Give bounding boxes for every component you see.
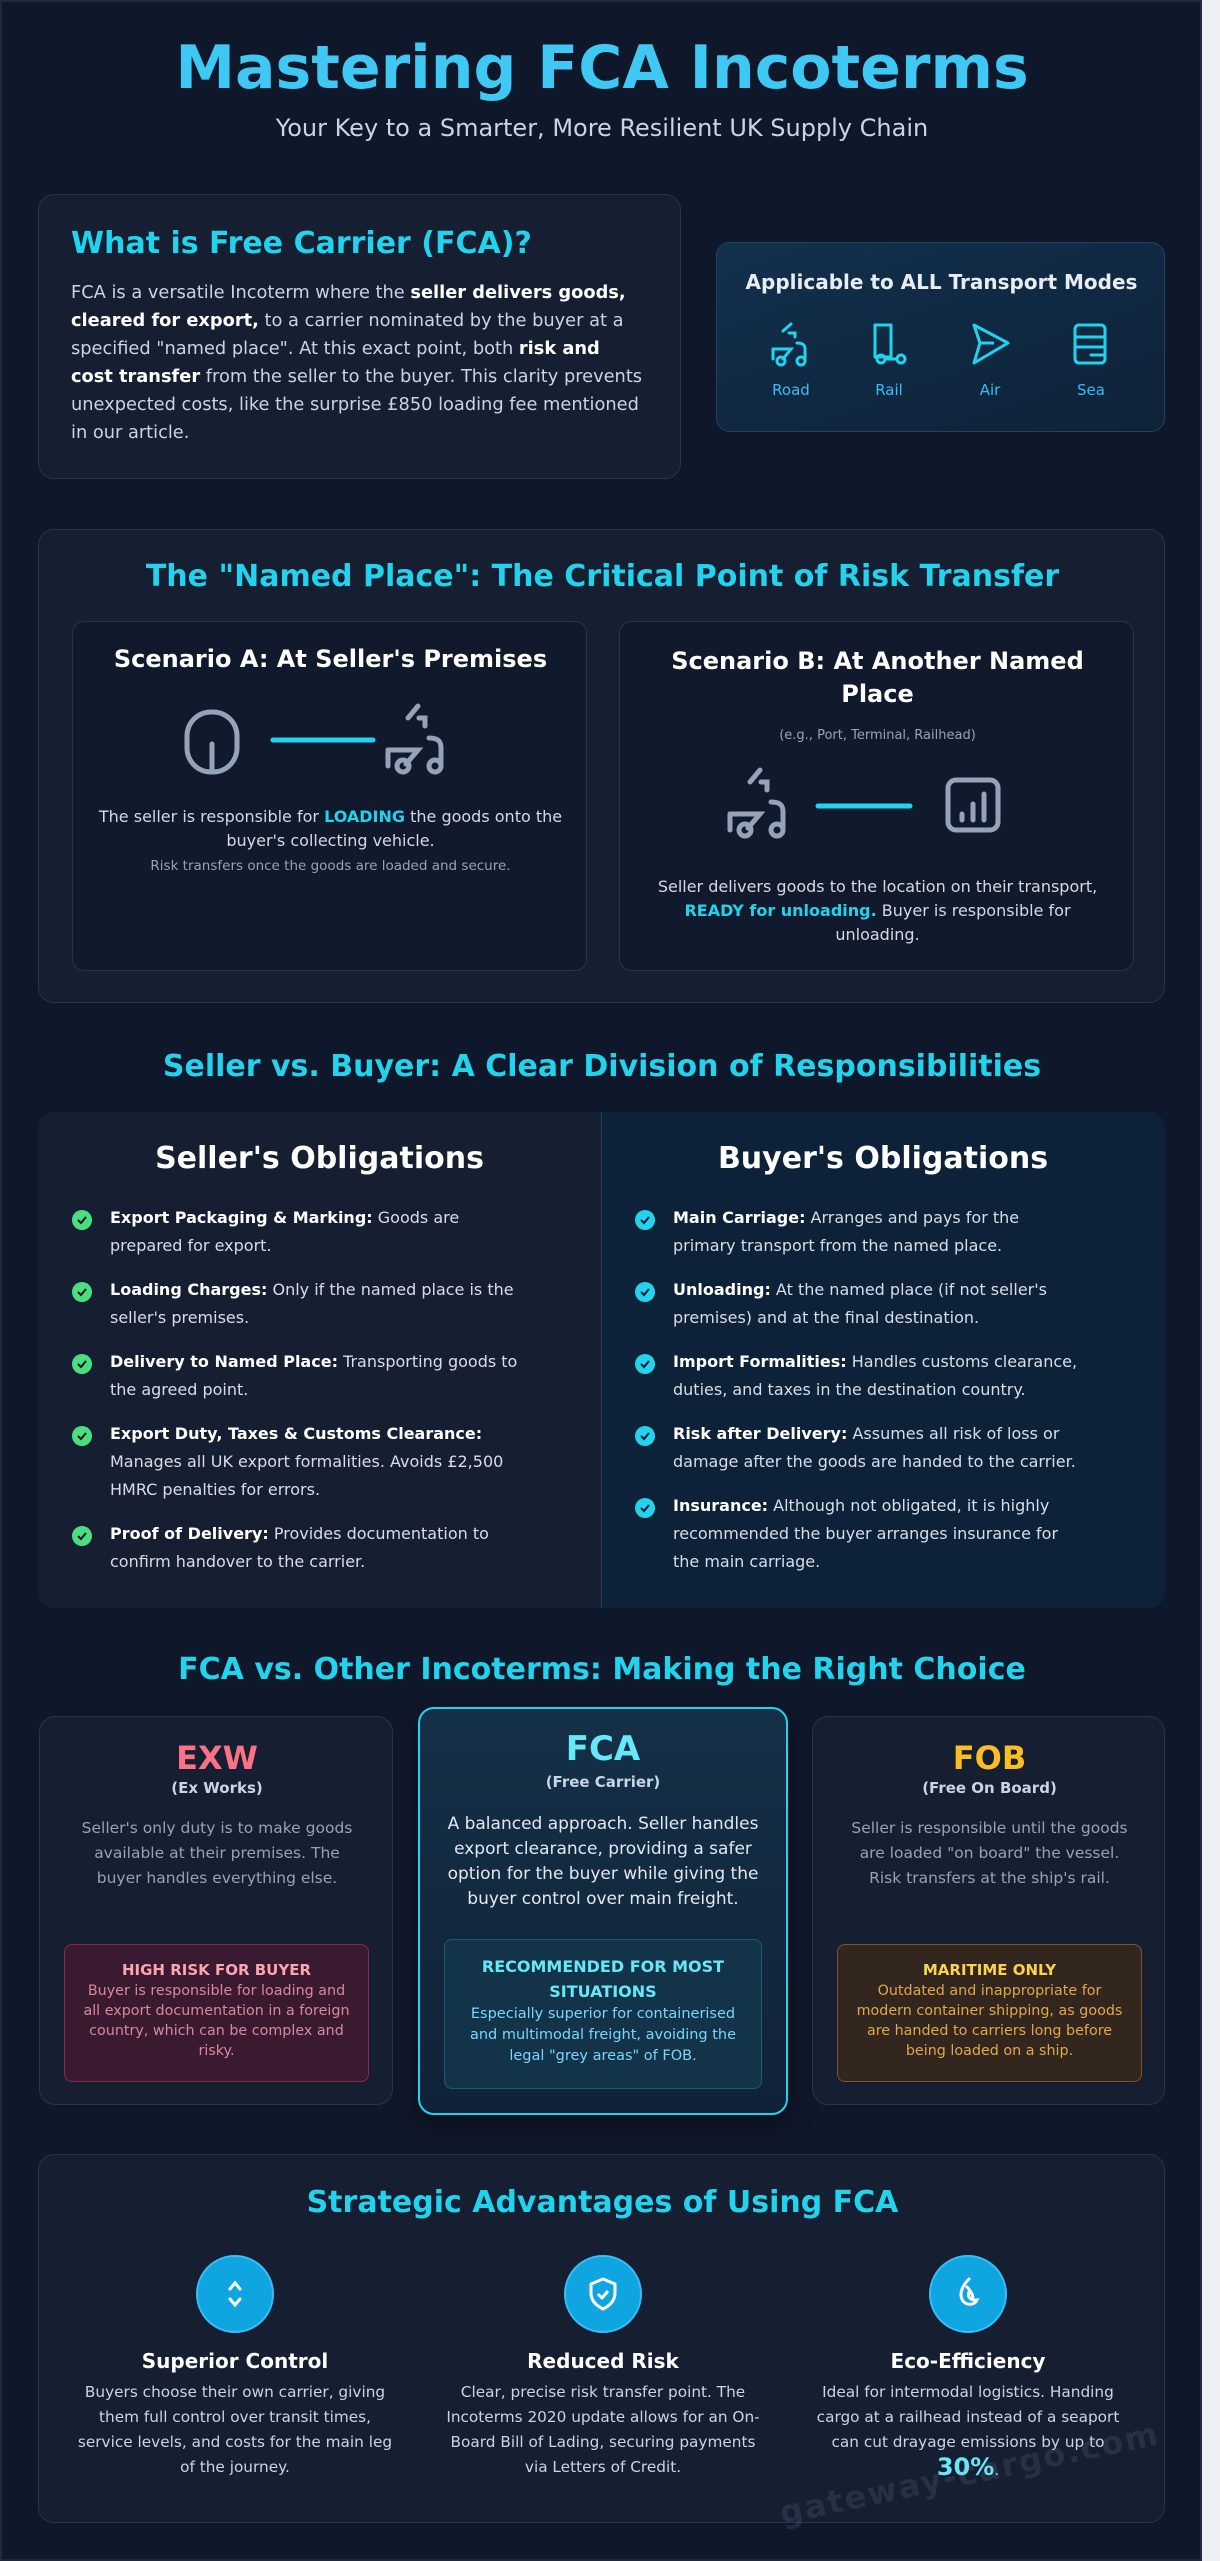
item: packaging: Export Packaging & Marking: Goods are xyxy=(110,1208,459,1227)
item: loading xyxy=(72,1280,514,1327)
item: insurance: Insurance: Although not obligated, it is highly xyxy=(673,1496,1049,1515)
callout: high risk: Buyer is responsible for loading and xyxy=(88,1983,345,1999)
advantage: eco-efficiency xyxy=(817,2255,1119,2481)
callout: recommended: legal "grey areas" of FOB. xyxy=(509,2048,697,2064)
item: delivery: Delivery to Named Place: Transporting goods to xyxy=(110,1352,517,1371)
callout: maritime only: MARITIME ONLY xyxy=(923,1961,1056,1979)
text: FCA definition: in our article. xyxy=(71,422,189,443)
icon: road: Road xyxy=(772,381,810,399)
icon: air xyxy=(972,324,1010,399)
item: loading: Loading Charges: Only if the named place is the xyxy=(110,1280,514,1299)
heading: advantages: Strategic Advantages of Using FCA xyxy=(307,2185,898,2220)
subtitle: Your Key to a Smarter, More Resilient UK Supply Chain xyxy=(276,114,928,142)
icon: air: Air xyxy=(980,381,1000,399)
text: EXW: available at their premises. The xyxy=(94,1844,340,1862)
icon: sea xyxy=(1074,324,1106,399)
heading: scenario B xyxy=(671,647,1084,708)
icon: rail: Rail xyxy=(875,381,903,399)
callout: high risk xyxy=(64,1944,369,2082)
panel: FCA: (Free Carrier) xyxy=(546,1773,660,1791)
panel: buyer obligations xyxy=(635,1141,1077,1571)
item: risk xyxy=(635,1424,1076,1471)
item: import: duties, and taxes in the destination country. xyxy=(673,1380,1026,1399)
advantage: reduced risk: Clear, precise risk transfer point. The xyxy=(461,2383,745,2401)
item: export duty: Export Duty, Taxes & Customs Clearance: xyxy=(110,1424,482,1443)
item: insurance: recommended the buyer arranges insurance for xyxy=(673,1524,1058,1543)
text: FOB: Risk transfers at the ship's rail. xyxy=(869,1869,1110,1887)
panel: what is FCA xyxy=(38,194,681,479)
callout: high risk: HIGH RISK FOR BUYER xyxy=(122,1961,311,1979)
text: FCA definition xyxy=(71,282,642,443)
heading: seller: Seller's Obligations xyxy=(155,1141,484,1176)
icon: road xyxy=(772,322,810,399)
icon: shield xyxy=(564,2255,642,2333)
panel: EXW: (Ex Works) xyxy=(171,1779,263,1797)
item: export duty: HMRC penalties for errors. xyxy=(110,1480,320,1499)
panel: FOB xyxy=(812,1716,1165,2105)
callout: maritime only: are handed to carriers long before xyxy=(867,2023,1112,2039)
text: scenario A: Risk transfers once the goods are loaded and secure. xyxy=(150,858,511,874)
heading: buyer: Buyer's Obligations xyxy=(718,1141,1048,1176)
item: risk: Risk after Delivery: Assumes all risk of loss or xyxy=(673,1424,1059,1443)
panel: scenario B xyxy=(619,621,1134,971)
panel: scenario A xyxy=(72,621,587,971)
advantage: reduced risk: Reduced Risk xyxy=(527,2349,679,2373)
heading: seller vs buyer: Seller vs. Buyer: A Clear Division of Responsibilities xyxy=(163,1049,1041,1084)
item: delivery xyxy=(72,1352,517,1399)
callout: maritime only: modern container shipping, as goods xyxy=(857,2003,1122,2019)
advantage: eco-efficiency: can cut drayage emissions by up to xyxy=(832,2433,1104,2451)
item: unloading: Unloading: At the named place (if not seller's xyxy=(673,1280,1047,1299)
item: main carriage: primary transport from the named place. xyxy=(673,1236,1002,1255)
text: EXW xyxy=(82,1819,352,1887)
text: FOB xyxy=(851,1819,1128,1887)
advantage: superior control: of the journey. xyxy=(180,2458,290,2476)
text: EXW: buyer handles everything else. xyxy=(97,1869,337,1887)
item: packaging: prepared for export. xyxy=(110,1236,272,1255)
text: scenario B: unloading. xyxy=(835,925,920,944)
advantage: superior control: Buyers choose their own carrier, giving xyxy=(85,2383,385,2401)
text: FCA definition: cost transfer from the seller to the buyer. This clarity prevents xyxy=(71,366,642,387)
advantage: reduced risk xyxy=(446,2255,760,2476)
item: unloading xyxy=(635,1280,1047,1327)
callout: maritime only xyxy=(837,1944,1142,2082)
item: export duty xyxy=(72,1424,503,1499)
item: main carriage: Main Carriage: Arranges and pays for the xyxy=(673,1208,1019,1227)
item: risk: damage after the goods are handed to the carrier. xyxy=(673,1452,1076,1471)
advantage: superior control xyxy=(78,2255,392,2476)
callout: recommended: RECOMMENDED FOR MOST xyxy=(482,1957,724,1976)
text: FOB: are loaded "on board" the vessel. xyxy=(860,1844,1119,1862)
icon: arrows xyxy=(196,2255,274,2333)
title: Mastering FCA Incoterms xyxy=(175,33,1029,103)
callout: high risk: risky. xyxy=(198,2043,235,2059)
item: packaging xyxy=(72,1208,459,1255)
text: FCA definition: cleared for export, to a carrier nominated by the buyer at a xyxy=(71,310,624,331)
advantage: eco-efficiency: cargo at a railhead instead of a seaport xyxy=(817,2408,1119,2426)
item: delivery: the agreed point. xyxy=(110,1380,248,1399)
icon: truck to terminal xyxy=(728,768,1000,838)
text: scenario A: buyer's collecting vehicle. xyxy=(226,831,435,850)
heading: FOB: FOB xyxy=(953,1739,1026,1777)
text: FCA xyxy=(448,1814,758,1909)
advantage: reduced risk: Board Bill of Lading, securing payments xyxy=(451,2433,755,2451)
text: FCA: export clearance, providing a safer xyxy=(454,1839,752,1859)
callout: recommended: and multimodal freight, avoiding the xyxy=(470,2027,736,2043)
panel: EXW xyxy=(39,1716,393,2105)
advantage: reduced risk: Incoterms 2020 update allows for an On- xyxy=(446,2408,760,2426)
item: import: Import Formalities: Handles customs clearance, xyxy=(673,1352,1077,1371)
icon: rail xyxy=(874,324,906,399)
text: FOB: Seller is responsible until the goods xyxy=(851,1819,1128,1837)
text: scenario B: Seller delivers goods to the location on their transport, xyxy=(658,877,1097,896)
heading: comparison: FCA vs. Other Incoterms: Making the Right Choice xyxy=(178,1652,1026,1687)
panel: seller obligations xyxy=(72,1141,517,1571)
text: scenario B: READY for unloading. Buyer is responsible for xyxy=(684,901,1071,920)
panel: named place xyxy=(38,529,1165,1003)
callout: high risk: all export documentation in a foreign xyxy=(83,2003,350,2019)
icon: seller building to truck xyxy=(184,704,444,774)
callout: recommended: SITUATIONS xyxy=(549,1982,657,2001)
icon: leaf xyxy=(929,2255,1007,2333)
heading: FCA: FCA xyxy=(566,1729,640,1769)
heading: named place: The "Named Place": The Critical Point of Risk Transfer xyxy=(146,559,1059,594)
callout: recommended: Especially superior for containerised xyxy=(471,2006,735,2022)
item: proof: confirm handover to the carrier. xyxy=(110,1552,365,1571)
advantage: eco-efficiency: Eco-Efficiency xyxy=(891,2349,1045,2373)
heading: what is FCA: What is Free Carrier (FCA)? xyxy=(71,226,532,261)
item: proof xyxy=(72,1524,489,1571)
advantage: reduced risk: via Letters of Credit. xyxy=(525,2458,681,2476)
callout: recommended xyxy=(444,1939,762,2089)
item: proof: Proof of Delivery: Provides documentation to xyxy=(110,1524,489,1543)
heading: applicable: Applicable to ALL Transport Modes xyxy=(746,270,1137,294)
text: examples: (e.g., Port, Terminal, Railhead) xyxy=(779,728,976,743)
panel: transport modes xyxy=(716,242,1165,432)
watermark: gateway-cargo.com xyxy=(776,2414,1163,2532)
panel: obligations xyxy=(38,1112,1165,1608)
heading: scenario B: Scenario B: At Another Named xyxy=(671,647,1084,675)
advantage: superior control: service levels, and costs for the main leg xyxy=(78,2433,392,2451)
advantage: eco-efficiency: Ideal for intermodal logistics. Handing xyxy=(822,2383,1114,2401)
text: scenario A: The seller is responsible for LOADING the goods onto the xyxy=(99,807,562,826)
advantage: eco-efficiency: 30%. xyxy=(937,2453,999,2481)
callout: high risk: country, which can be complex and xyxy=(89,2023,344,2039)
advantage: superior control: Superior Control xyxy=(142,2349,328,2373)
item: unloading: premises) and at the final destination. xyxy=(673,1308,979,1327)
text: EXW: Seller's only duty is to make goods xyxy=(82,1819,352,1837)
panel: FOB: (Free On Board) xyxy=(922,1779,1057,1797)
item: loading: seller's premises. xyxy=(110,1308,249,1327)
text: FCA: A balanced approach. Seller handles xyxy=(448,1814,758,1834)
item: export duty: Manages all UK export formalities. Avoids £2,500 xyxy=(110,1452,503,1471)
item: import xyxy=(635,1352,1077,1399)
callout: maritime only: being loaded on a ship. xyxy=(906,2043,1073,2059)
panel: FCA xyxy=(418,1707,788,2115)
text: scenario A xyxy=(98,807,562,874)
callout: maritime only: Outdated and inappropriate for xyxy=(878,1983,1101,1999)
heading: EXW: EXW xyxy=(176,1739,258,1777)
heading: scenario B: Place xyxy=(841,680,914,708)
text: FCA definition: unexpected costs, like the surprise £850 loading fee mentioned xyxy=(71,394,639,415)
advantage: superior control: them full control over transit times, xyxy=(99,2408,371,2426)
text: scenario B xyxy=(658,877,1097,944)
heading: scenario A: Scenario A: At Seller's Premises xyxy=(114,645,547,673)
text: FCA: option for the buyer while giving the xyxy=(448,1864,758,1884)
item: insurance xyxy=(635,1496,1058,1571)
item: main carriage xyxy=(635,1208,1019,1255)
text: FCA: buyer control over main freight. xyxy=(467,1889,739,1909)
item: insurance: the main carriage. xyxy=(673,1552,820,1571)
text: FCA definition: specified "named place". At this exact point, both risk and xyxy=(71,338,600,359)
panel: strategic advantages xyxy=(38,2154,1165,2523)
text: FCA definition: FCA is a versatile Incoterm where the seller delivers goods, xyxy=(71,282,626,303)
icon: sea: Sea xyxy=(1077,381,1105,399)
